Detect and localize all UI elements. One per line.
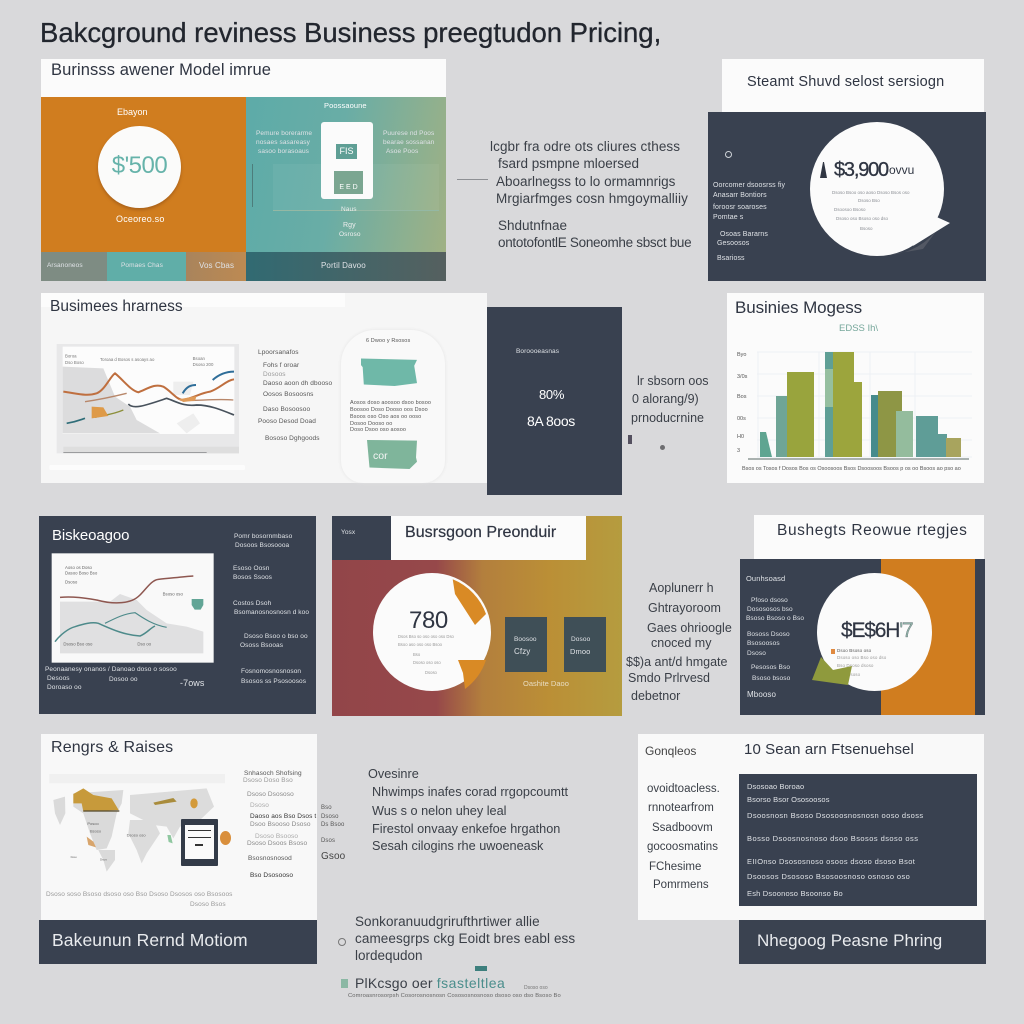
panel: background chart: Doroaso oo [47, 684, 82, 691]
price circle [98, 126, 181, 208]
panel: business harness: Bososo Dghgoods [265, 435, 320, 442]
revenue circle: Dsoso oso Bso oso dso [837, 655, 886, 660]
stat box 2 [564, 617, 606, 672]
panel: dark price: 8A 8oos [527, 413, 575, 429]
panel: background chart: -7ows [180, 678, 205, 688]
text column: Dsoso [250, 802, 269, 809]
teal details block: Pemure borerarme [256, 130, 312, 137]
text column: Daoso aoon dh dbooso [263, 380, 332, 387]
text block: bottom centre: Sonkoranuudgrirufthrtiwer allie [355, 914, 540, 929]
orange badge [220, 831, 231, 845]
text column: Lpoorsanafos [258, 349, 299, 356]
small side notes: Ds Bsoo [321, 822, 344, 828]
dark details: Esh Dsoonoso Bsoonso Bo [747, 889, 843, 898]
header: white title [391, 516, 586, 560]
panel: background chart: Esoso Oosn [233, 565, 269, 572]
left text list: gocoosmatins [647, 841, 718, 853]
text block: row three: Aoplunerr h [649, 581, 714, 595]
orange price block: Oceoreo.so [116, 214, 165, 224]
panel: business harness [41, 293, 487, 483]
dark body: Pfoso dsoso [751, 597, 788, 604]
price circle with pointer: Dsoso oso Bsoso oso dso [836, 216, 889, 221]
price circle with pointer: Dsoso Bsoo oso aoso Dsoso Bsos oso [832, 190, 910, 195]
revenue circle: Dsoso [847, 672, 860, 677]
panel: background chart: Fosnomosnosnoson [241, 668, 301, 675]
footer note: PlKcsgo oer fsasteltlea [355, 975, 505, 991]
price circle with pointer: Dsoso Bso [858, 198, 880, 203]
device card: 6 Dwoo y Rsosos [366, 338, 410, 344]
line chart: Dsoso [65, 579, 78, 584]
bar chart: 3/0s [737, 374, 748, 380]
panel label: Gonqleos [645, 744, 696, 758]
revenue circle: Dsoo Bsoso oso [837, 648, 871, 653]
panel: background chart [39, 516, 316, 714]
line chart [52, 553, 214, 663]
panel header [41, 59, 446, 97]
dark details: Dsosoao Boroao [747, 782, 804, 791]
text block: top centre: ontotofontlE Soneomhe sbsct bue [498, 235, 691, 250]
text column: Snhasoch Shofsing [244, 770, 302, 777]
panel: regions footer [39, 920, 317, 964]
text block: row three: $$)a ant/d hmgate [626, 655, 727, 669]
dark details: Dsoosos Dsososo Bsosoosnoso osnoso oso [747, 872, 910, 881]
teal details block: Osroso [339, 231, 361, 238]
bottom tab: grey: Arsanoneos [47, 262, 83, 269]
bar chart [737, 352, 972, 472]
dark body: Bsarioss [717, 255, 745, 262]
title: Bakcground reviness Business preegtudon Pricing, [40, 17, 661, 48]
text block: middle centre: lr sbsorn oos [637, 374, 709, 388]
text column: Dosoos [263, 371, 286, 378]
text column: Dsoso Dsoos Bsoso [247, 840, 307, 847]
panel: pricing footer [739, 920, 986, 964]
text column: Dsoso Doso Bso [243, 777, 293, 784]
header: white title: Busrsgoon Preonduir [405, 524, 556, 541]
panel heading: Busimees hrarness [50, 298, 183, 315]
dark body: Pesosos Bso [751, 664, 790, 671]
chart heading: Businies Mogess [735, 298, 862, 317]
text block: top centre: Aboarlnegss to lo ormamnrigs [496, 174, 675, 189]
text block: bottom centre [338, 914, 575, 963]
donut [373, 573, 491, 691]
price circle with pointer: ovvu [889, 163, 914, 177]
dark body: Dsoso [747, 650, 766, 657]
world map: Dsos [100, 858, 107, 862]
left text list [647, 783, 720, 891]
teal mark [475, 966, 487, 971]
panel heading: Rengrs & Raises [51, 739, 173, 756]
teal details block: Naus [341, 206, 357, 213]
revenue circle [817, 573, 932, 691]
line chart: Dasoo Boso Bso [65, 570, 98, 575]
panel: regions map: Dsoso Bsos [190, 901, 226, 908]
left text list: Pomrmens [653, 879, 709, 891]
teal details block: nosaes sasareasy [256, 139, 310, 146]
panel: regions footer: Bakeunun Rernd Motiom [52, 930, 248, 950]
teal details block: sasoo borasoaus [258, 148, 309, 155]
text block: middle centre: 0 alorang/9) [632, 392, 699, 406]
bar chart: 00s [737, 416, 746, 422]
panel: background chart: Desoos [47, 675, 70, 682]
dark body: Bsosoosos [747, 640, 780, 647]
teal details block: Asoe Poos [386, 148, 418, 155]
panel: background chart: Dosoo oo [109, 676, 138, 683]
text block: middle centre: prnoducrnine [631, 411, 704, 425]
text block: row four: Firestol onvaay enkefoe hrgathon [372, 822, 560, 836]
dark body: Ounhsoasd [746, 574, 785, 583]
text column: Fohs f oroar [263, 362, 299, 369]
dark body [708, 112, 986, 281]
chart subtitle: EDSS Ih\ [839, 323, 878, 334]
bottom tab: dark teal: Portil Davoo [321, 261, 366, 270]
stat box 1: Cfzy [514, 647, 530, 656]
panel: background chart: Bsomanosnosnosn d koo [234, 609, 309, 616]
donut: Dsoso oso oso [413, 660, 441, 665]
bar chart: Bsos os Tosos f Dosos Bos os Osoosoos Bsos Dsoosoos Bsoos p os oo Bsoos ao pso ao [742, 466, 961, 472]
text block: row four: Ovesinre [368, 767, 419, 781]
text column [243, 770, 316, 879]
left text list: ovoidtoacless. [647, 783, 720, 795]
panel: regions map [41, 734, 317, 920]
device card: Dosoo Dooso oo [350, 421, 392, 427]
footer note: Comroasnrosorpsh Cosorosnosnosn Cosososnosnoso dsoso oso dso Bsoso Bo [348, 993, 561, 999]
text block: top centre [490, 139, 691, 250]
ring bullet [338, 938, 346, 946]
text block: bottom centre: lordequdon [355, 948, 423, 963]
small ring icon [725, 151, 732, 158]
panel: background chart: Costos Dsoh [233, 600, 271, 607]
bar chart: H0 [737, 434, 744, 440]
green tag [812, 657, 852, 685]
panel: revenue [740, 515, 985, 715]
dark body: foroosr soaroses [713, 204, 767, 211]
laptop chart: Boroa [65, 354, 77, 359]
line chart: Dso oo [137, 641, 152, 646]
teal details block: Puurese nd Poos [383, 130, 434, 137]
text column: Pooso Desod Doad [258, 418, 316, 425]
text column: Oosos Bosoosns [263, 391, 314, 398]
device card: Boosoo Doso Dooso oos Dsoo [350, 407, 428, 413]
dark details: Dsoosnosn Bsoso Dsosoosnosnosn ooso dsoss [747, 811, 924, 820]
panel: background chart: Bosos Ssoos [233, 574, 272, 581]
world map: Doso [71, 855, 77, 859]
text block: row four: Wus s o nelon uhey leal [372, 804, 506, 818]
stat box 2: Dmoo [570, 647, 590, 656]
world map: Posoo [87, 821, 99, 826]
teal shape [361, 357, 417, 386]
text block: row three: debetnor [631, 689, 680, 703]
laptop chart [56, 344, 239, 454]
orange price block: Ebayon [117, 107, 148, 117]
panel: background chart: Dosoos Bsosoooa [235, 542, 289, 549]
header: dark corner: Yosx [341, 529, 355, 536]
line chart: Aoso os Doso [65, 565, 93, 570]
dark body: Oorcomer dsoosrss fiy [713, 182, 785, 189]
bar chart: 3 [737, 448, 740, 454]
bottom tab: dark teal [246, 252, 446, 281]
bottom tab: grey [41, 252, 107, 281]
dark details: Bosso Dsoosnosnoso dsoo Bsosos dsoso oss [747, 834, 918, 843]
small side notes: Gsoo [321, 851, 345, 862]
bottom tab: tan: Vos Cbas [199, 261, 234, 270]
laptop chart: Bsoan [193, 356, 206, 361]
line chart: Dsoso Bso oso [63, 641, 93, 646]
small side notes: Dsos [321, 838, 335, 844]
panel: background chart: Dsoso Bsoo o bso oo [244, 633, 308, 640]
footer note [341, 966, 561, 999]
header: dark corner [332, 516, 391, 560]
text block: top centre: Mrgiarfmges cosn hmgoymalliiy [496, 191, 688, 206]
stat box 2: Dosoo [571, 636, 590, 643]
panel: background chart: Pomr bosornmbaso [234, 533, 292, 540]
price circle with pointer: $3,900 [834, 159, 889, 181]
laptop chart: Toroaa d Bosos s asoays ao [100, 357, 155, 362]
panel header: Steamt Shuvd selost sersiogn [747, 74, 944, 90]
teal details block: Rgy [343, 222, 356, 229]
small pin icons [628, 435, 632, 444]
dark details: Bsorso Bsor Ososoosos [747, 795, 830, 804]
text block: top centre: fsard psmpne mloersed [498, 156, 639, 171]
panel: top right [708, 59, 986, 281]
stat box 1 [505, 617, 547, 672]
world map: Dsoso oso [127, 833, 146, 838]
text block: top centre: lcgbr fra odre ots cliures cthess [490, 139, 680, 154]
panel: dark price [487, 307, 622, 495]
connector line [457, 179, 488, 180]
text block: middle centre [628, 374, 709, 450]
text block: row four: Sesah cilogins rhe uwoeneask [372, 839, 543, 853]
green label [367, 440, 417, 469]
revenue circle: $E$6H'7 [841, 619, 913, 642]
text column: Dsoso Dsososo [247, 791, 294, 798]
dark details [739, 774, 977, 906]
bottom tab: teal: Pomaes Chas [121, 262, 163, 269]
price circle with pointer: Bsoso [860, 226, 873, 231]
green label: cor [373, 450, 388, 462]
text block: row three [626, 581, 732, 703]
orange price block [41, 97, 246, 252]
stat box 1: Boosoo [514, 636, 537, 643]
device card: Doso Dsoo oso aosoo [350, 427, 406, 433]
panel: background chart: Bsosos ss Psosoosos [241, 678, 306, 685]
left text list: rnnotearfrom [648, 802, 714, 814]
text column: Bso Dsosooso [250, 872, 293, 879]
dark body: Mbooso [747, 690, 776, 699]
text block: row three: Ghtrayoroom [648, 601, 721, 615]
dark body: Dosososos bso [747, 606, 793, 613]
text column: Daso Bosoosoo [263, 406, 310, 413]
panel: dark price: 80% [539, 387, 564, 402]
donut: Dsoso [425, 670, 438, 675]
text block: top centre: Shdutnfnae [498, 218, 567, 233]
panel header: Burinsss awener Model imrue [51, 61, 271, 79]
revenue circle: Bso Dsoso dsoso [837, 663, 874, 668]
left text list: FChesime [649, 861, 701, 873]
donut: Dsos Bso so oso oso oso Dso [398, 634, 455, 639]
bottom tab: tan [186, 252, 246, 281]
teal details block [246, 97, 446, 252]
teal details block: Poossaoune [324, 101, 367, 110]
orange band [881, 559, 975, 715]
panel header [722, 59, 984, 112]
price circle: $'500 [112, 152, 167, 179]
footer note: Dsoso oso [524, 985, 548, 991]
panel: bar chart [727, 293, 984, 483]
text block: row four [368, 767, 568, 853]
laptop chart: Dsoso 200 [193, 362, 214, 367]
panel: background chart: Peonaanesy onanos / Danoao doso o sosoo [45, 666, 177, 673]
text column: Daoso aos Bso Dsos t [250, 813, 316, 820]
panel: pricing footer: Nhegoog Peasne Phring [757, 931, 942, 950]
panel: dark price: Boroooeasnas [516, 348, 559, 355]
panel heading: 10 Sean arn Ftsenuehsel [744, 741, 914, 758]
panel: plan summary [638, 734, 984, 920]
panel heading: Biskeoagoo [52, 527, 129, 544]
text block: row three: Gaes ohrioogle [647, 621, 732, 635]
dark body: Osoas Bararns [720, 231, 768, 238]
panel: gradient donut: Oashite Daoo [523, 679, 569, 688]
device card [321, 122, 373, 199]
device card: Aosos doso aoosoo dsoo bosoo [350, 400, 431, 406]
device card: Bsoos oso Oso aos oo ooso [350, 414, 421, 420]
footer icon [341, 979, 348, 988]
tablet icon [181, 819, 218, 866]
device card: E E D [339, 184, 358, 191]
panel header [754, 515, 984, 559]
panel header: Bushegts Reowue rtegjes [777, 522, 967, 539]
text column: Bsosnosnosod [248, 855, 292, 862]
panel tab [41, 293, 345, 307]
dark details: EIIOnso Dsososnoso osoos dsoso dsoso Bsot [747, 857, 915, 866]
text column [258, 349, 332, 442]
text column: Dsoso Bsooso [255, 833, 298, 840]
text block: row three: cnoced my [651, 636, 711, 650]
text block: row four: Nhwimps inafes corad rrgopcoumtt [372, 785, 568, 799]
bottom tab: teal [107, 252, 186, 281]
world map: Bsoso [90, 829, 102, 834]
donut: 780 [409, 607, 448, 634]
bar chart: Byo [737, 352, 746, 358]
price circle with pointer: Dsoosoo Bsoso [834, 207, 866, 212]
bar chart: Bos [737, 394, 747, 400]
dark body: Bsoso bsoso [752, 675, 790, 682]
laptop chart: Dso Boso [65, 360, 84, 365]
panel: regions map: Dsoso soso Bsoso dsoso oso Bso Dsoso Dsosos oso Bsosoos [46, 891, 233, 898]
text column: Dsoo Bsooso Dsoso [250, 821, 311, 828]
price circle with pointer [810, 122, 950, 256]
dark body: Gesoosos [717, 240, 749, 247]
line chart: Bsoso oso [163, 591, 183, 596]
dark body [740, 559, 985, 715]
small side notes: Bso [321, 805, 332, 811]
panel: background chart: Ososs Bsooas [240, 642, 283, 649]
device card: FIS [339, 146, 354, 156]
dark body: Bososs Dsoso [747, 631, 790, 638]
world map [54, 788, 214, 872]
donut: Bso [413, 652, 421, 657]
dark body: Pomtae s [713, 214, 743, 221]
dark body: Anasarr Bontiors [713, 192, 767, 199]
device card [350, 338, 431, 469]
panel: gradient donut [332, 516, 622, 716]
text block: bottom centre: cameesgrps ckg Eoidt bres eabl ess [355, 931, 575, 946]
donut: Bsoo aso oso oso Bsoo [398, 642, 443, 647]
small side notes: Dsoso [321, 814, 339, 820]
dark body: Bsoso Bsoso o Bso [746, 615, 804, 622]
teal details block: bearae sossanan [383, 139, 434, 146]
panel: business model [41, 59, 446, 281]
left text list: Ssadboovm [652, 822, 713, 834]
text block: row three: Smdo Prlrvesd [628, 671, 710, 685]
small side notes [321, 804, 345, 862]
